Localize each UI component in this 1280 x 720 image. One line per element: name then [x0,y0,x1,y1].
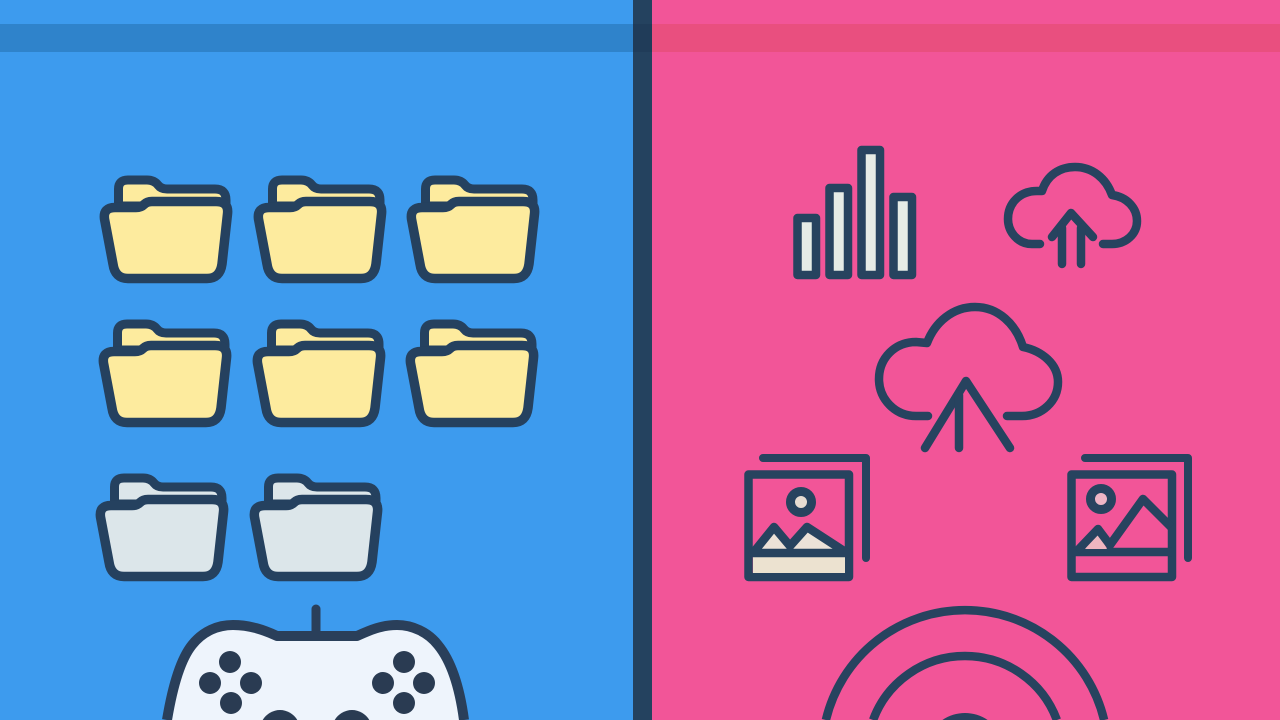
mountains [753,527,847,553]
sun [1090,488,1112,510]
front frame [748,474,849,577]
analog sticks [263,710,369,720]
icon: small cloud upload [1008,167,1137,264]
icon: large cloud upload [879,307,1058,448]
panel: blue left background [0,0,633,720]
icon: concentric target [826,610,1104,720]
icon: bar chart [798,150,912,275]
icon: gray folder row 3 column 2 [254,478,378,576]
right button cluster [372,651,435,714]
controller cable [312,609,320,636]
icon: yellow folder row 2 column 2 [257,324,381,422]
folder group: yellow and gray folders [100,180,535,576]
back frame [763,458,866,558]
panel: pink right background [652,0,1280,720]
header band: pink side [652,24,1280,52]
front frame [1072,474,1172,577]
icon: yellow folder row 2 column 3 [410,324,534,422]
icon: yellow folder row 2 column 1 [103,324,227,422]
icon: left image stack [748,458,866,577]
icon: yellow folder row 1 column 3 [411,180,535,278]
controller body [167,625,464,720]
horizon line [1072,548,1172,556]
icon: yellow folder row 1 column 2 [258,180,382,278]
icon: game controller [167,609,464,720]
icon: gray folder row 3 column 1 [100,478,224,576]
icon: right image stack [1072,458,1188,577]
back frame [1085,458,1188,558]
icon: yellow folder row 1 column 1 [104,180,228,278]
small peak fill [1085,533,1107,549]
center divider [633,0,652,720]
caption strip [753,557,845,573]
left button cluster [199,651,262,714]
sun [790,492,812,512]
header band: blue side [0,24,633,52]
mountain outline [1077,499,1171,551]
